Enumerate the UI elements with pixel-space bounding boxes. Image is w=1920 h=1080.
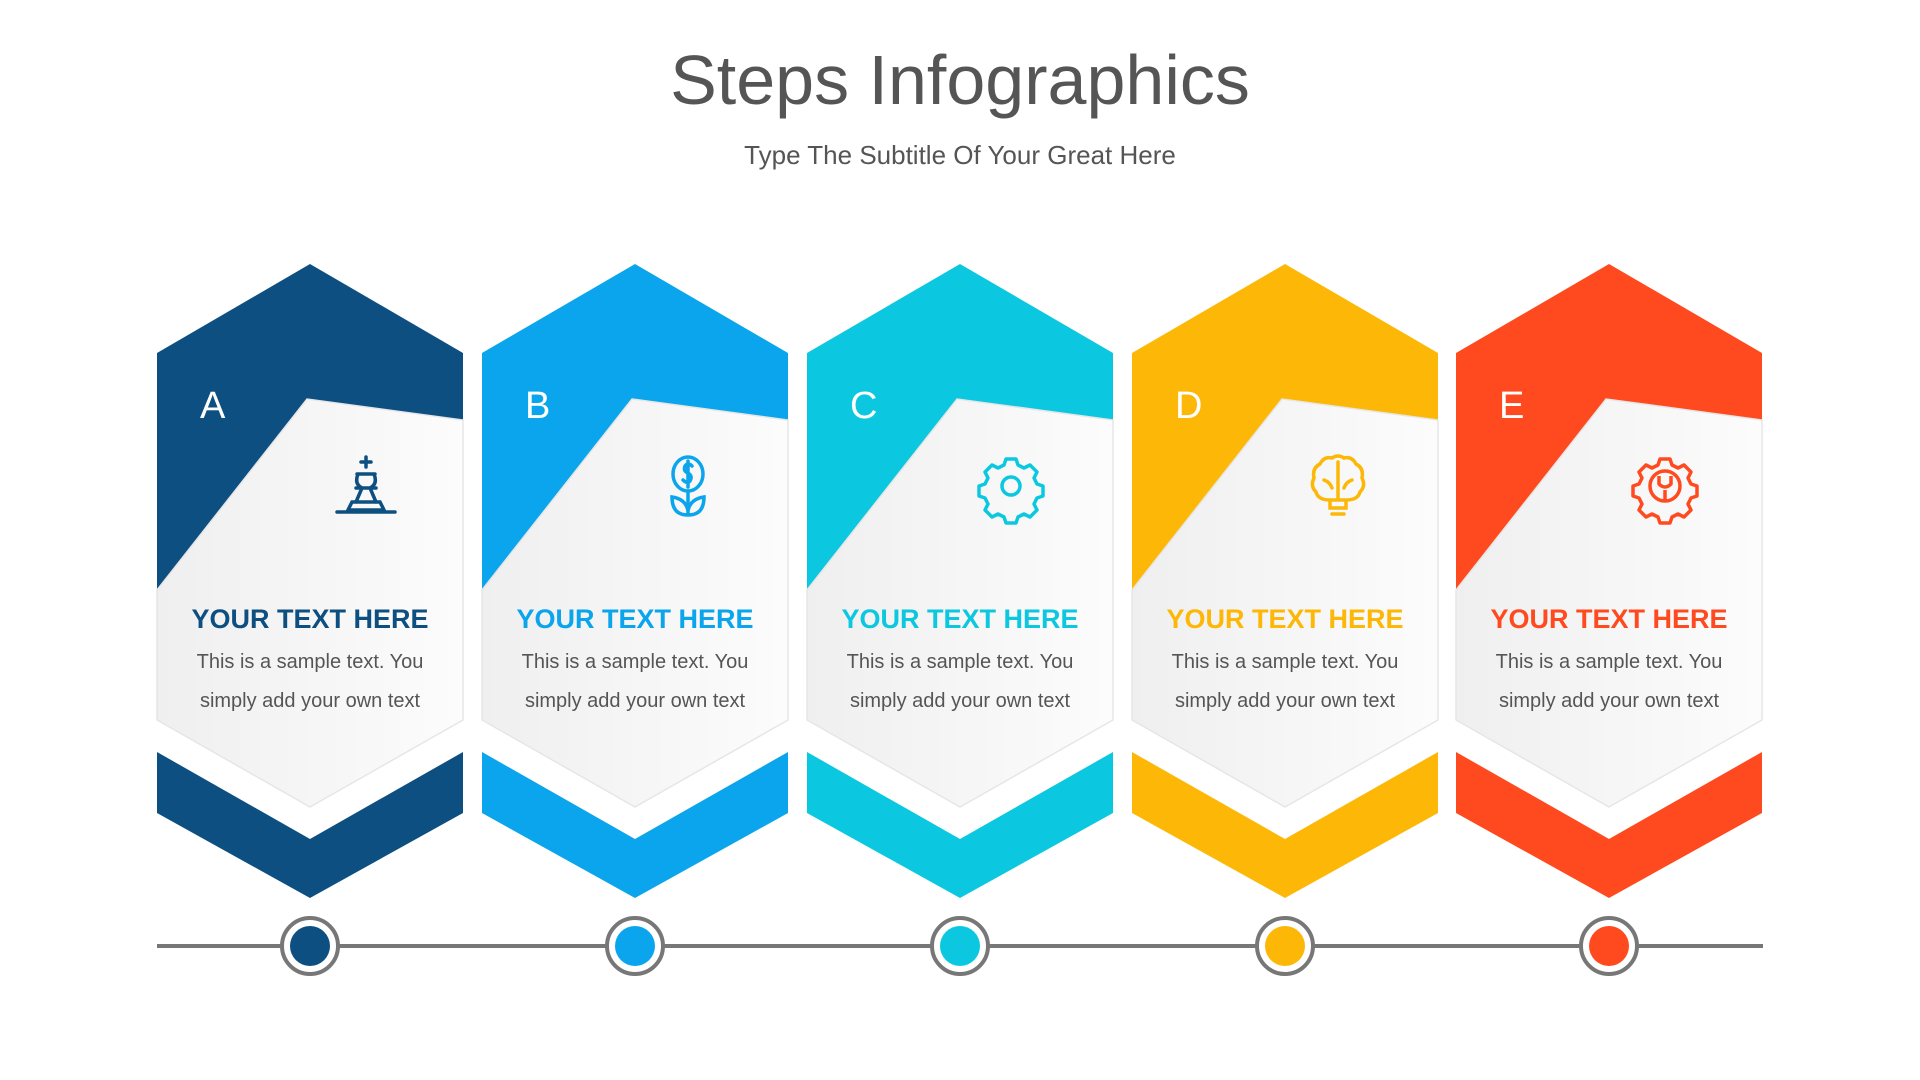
timeline line: [157, 944, 1763, 948]
step B: simply add your own text: [525, 690, 745, 712]
step A: This is a sample text. You: [197, 651, 423, 673]
step B: YOUR TEXT HERE: [516, 604, 754, 634]
step D: YOUR TEXT HERE: [1166, 604, 1404, 634]
icon: chess king: [337, 457, 395, 512]
step D: simply add your own text: [1175, 690, 1395, 712]
step E: simply add your own text: [1499, 690, 1719, 712]
step A: A: [200, 385, 226, 427]
step B: This is a sample text. You: [522, 651, 748, 673]
icon: brain bulb: [1312, 456, 1364, 514]
step C: simply add your own text: [850, 690, 1070, 712]
step C: [807, 264, 1113, 974]
step C: C: [850, 385, 877, 427]
step C: This is a sample text. You: [847, 651, 1073, 673]
icon: money plant: [672, 457, 704, 515]
step E: E: [1499, 385, 1524, 427]
step A: [157, 264, 463, 974]
step D: D: [1175, 385, 1202, 427]
step C: YOUR TEXT HERE: [841, 604, 1079, 634]
step A: YOUR TEXT HERE: [191, 604, 429, 634]
step B: B: [525, 385, 550, 427]
icon: gear with wrench: [1633, 459, 1697, 523]
step E: [1456, 264, 1762, 974]
icon: gear: [979, 459, 1043, 523]
step D: This is a sample text. You: [1172, 651, 1398, 673]
step D: [1132, 264, 1438, 974]
step B: [482, 264, 788, 974]
title: Steps Infographics: [670, 41, 1250, 119]
step E: This is a sample text. You: [1496, 651, 1722, 673]
step A: simply add your own text: [200, 690, 420, 712]
subtitle: Type The Subtitle Of Your Great Here: [744, 140, 1176, 170]
step E: YOUR TEXT HERE: [1490, 604, 1728, 634]
